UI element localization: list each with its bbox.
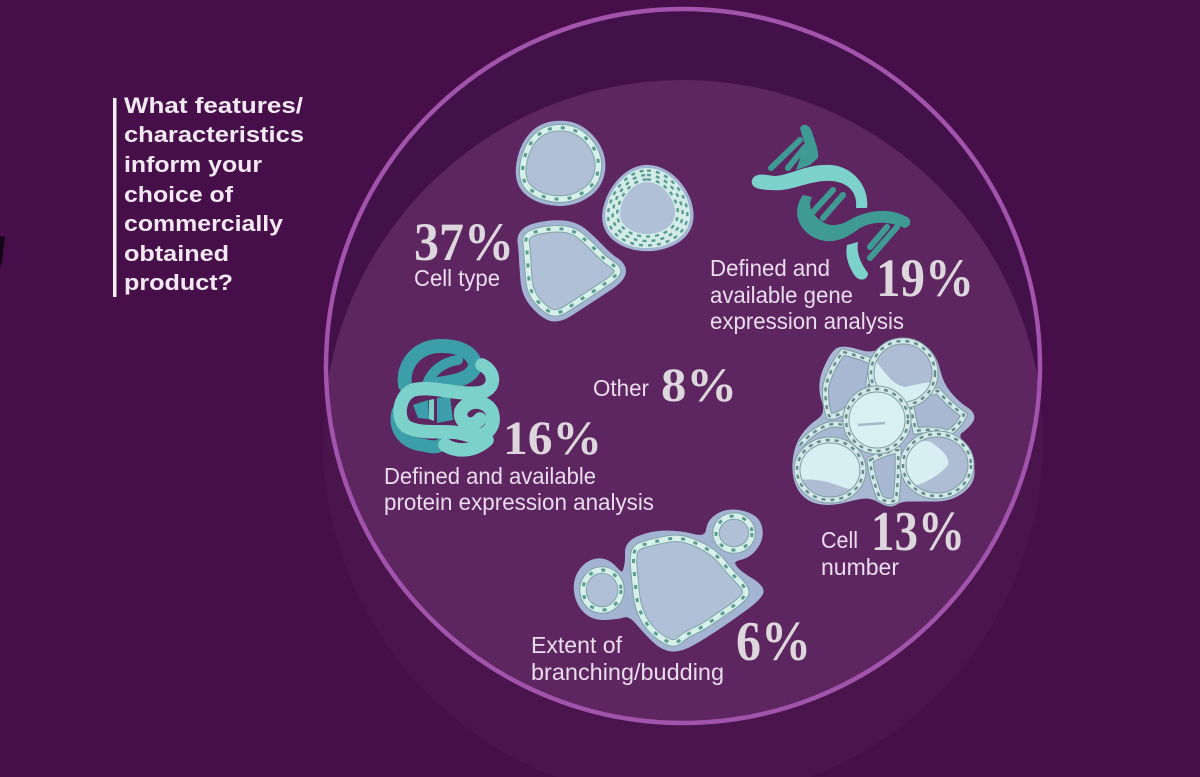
cell: bottom right bbox=[903, 434, 971, 496]
icon: DNA helix bbox=[752, 125, 910, 280]
stat: 6% branching bbox=[531, 611, 811, 685]
icon: cell type organoids bbox=[523, 128, 694, 313]
stat: 19% gene expression bbox=[710, 248, 974, 334]
organoid: irregular bbox=[526, 229, 617, 313]
icon: folded protein bbox=[397, 346, 493, 450]
panel: lower disc glow bbox=[323, 80, 1043, 777]
organoid: round single layer bbox=[523, 128, 598, 199]
stat: 16% protein expression: Defined and available bbox=[384, 463, 596, 489]
stat: 6% branching: branching/budding bbox=[531, 659, 724, 685]
stat: 19% gene expression: expression analysis bbox=[710, 308, 904, 334]
stat: 8% other: Other bbox=[593, 375, 649, 401]
question heading bbox=[113, 93, 304, 297]
stat: 13% cell number: number bbox=[821, 554, 899, 580]
stat: 13% cell number: Cell bbox=[821, 527, 858, 553]
icon: branching organoid bbox=[576, 512, 761, 649]
question heading: obtained bbox=[124, 241, 229, 266]
question heading: choice of bbox=[124, 182, 234, 207]
cell: top right bbox=[871, 341, 935, 405]
stat: 6% branching: Extent of bbox=[531, 632, 623, 658]
protein core stripes bbox=[413, 396, 453, 423]
question heading: inform your bbox=[124, 152, 262, 177]
stat: 19% gene expression: available gene bbox=[710, 282, 853, 308]
mark: dark sliver at left edge bbox=[0, 236, 5, 268]
stat: 13% cell number: 13% bbox=[871, 501, 965, 563]
icon: cell number cluster bbox=[796, 341, 971, 503]
stat: 16% protein expression bbox=[384, 412, 654, 515]
panel: main circle bbox=[323, 9, 1043, 777]
stat: 6% branching: 6% bbox=[736, 611, 811, 673]
question heading: product? bbox=[124, 270, 233, 295]
stat: 19% gene expression: Defined and bbox=[710, 255, 830, 281]
bud: left bbox=[583, 570, 621, 610]
question heading: What features/ bbox=[124, 93, 303, 118]
cell: centre bbox=[846, 389, 908, 451]
stat: 13% cell number bbox=[821, 501, 965, 580]
question heading: characteristics bbox=[124, 122, 304, 147]
stat: 37% cell type: Cell type bbox=[414, 265, 500, 291]
stat: 37% cell type: 37% bbox=[414, 212, 514, 272]
stat: 8% other: 8% bbox=[661, 359, 737, 412]
stat: 19% gene expression: 19% bbox=[876, 248, 974, 308]
organoid: multilayer bbox=[602, 165, 694, 251]
cell: bottom left bbox=[797, 440, 863, 500]
stat: 8% other bbox=[593, 359, 737, 412]
background cells bbox=[800, 352, 964, 502]
bud: upper right bbox=[716, 516, 752, 550]
stat: 16% protein expression: 16% bbox=[503, 412, 602, 465]
stat: 16% protein expression: protein expression analysis bbox=[384, 489, 654, 515]
question heading: commercially bbox=[124, 211, 284, 236]
